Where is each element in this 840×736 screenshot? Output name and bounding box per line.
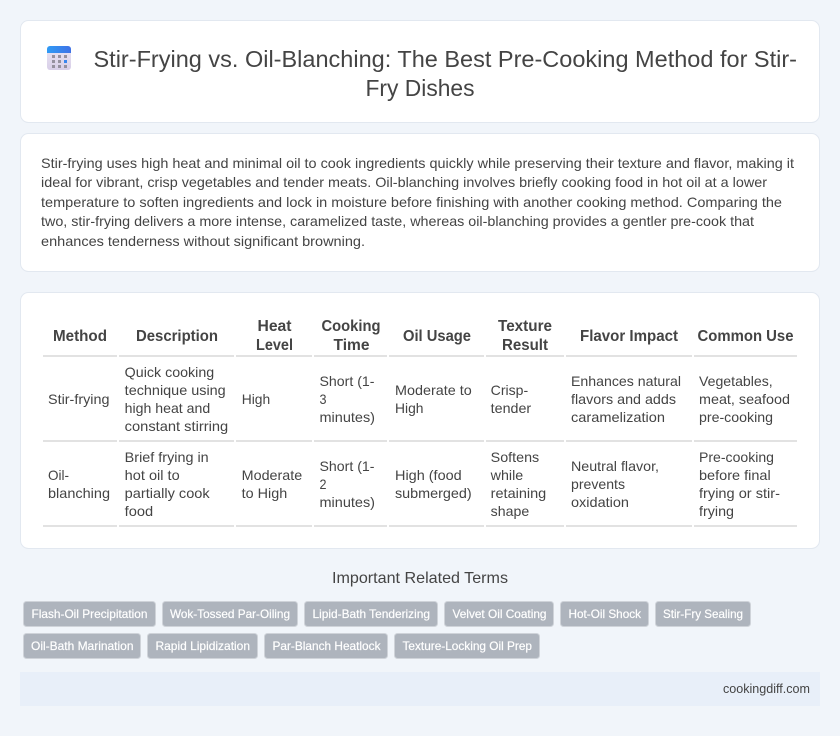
table row: stir-frying: tender — [491, 400, 532, 416]
text block: summary paragraph — [41, 155, 794, 249]
related term tags: Texture-Locking Oil Prep — [402, 639, 532, 653]
table row: oil-blanching: prevents — [571, 476, 625, 492]
icon: calendar — [47, 46, 71, 70]
related term tags: Stir-Fry Sealing — [663, 607, 743, 621]
table row: oil-blanching: Softens — [491, 449, 539, 465]
table row: oil-blanching: frying — [699, 503, 734, 519]
table row: oil-blanching: Oil- — [48, 467, 69, 483]
table header row: Oil Usage — [403, 328, 471, 345]
table row: oil-blanching: food — [125, 503, 153, 519]
table row: oil-blanching: hot oil to — [125, 467, 180, 483]
table row: oil-blanching: shape — [491, 503, 529, 519]
related term tags: Rapid Lipidization — [156, 639, 250, 653]
table row: stir-frying: high heat and — [125, 400, 210, 416]
table header row: Time — [334, 337, 370, 354]
table row: stir-frying: High — [395, 400, 424, 416]
table header row: Texture — [498, 318, 552, 335]
table row: stir-frying: Vegetables, — [699, 373, 773, 389]
table row: stir-frying: High — [242, 391, 270, 407]
related term tags: Velvet Oil Coating — [452, 607, 546, 621]
title: Stir-Frying vs. Oil-Blanching: The Best Pre-Cooking Method for Stir- — [94, 46, 797, 72]
table row: oil-blanching: Short (1- — [320, 458, 375, 474]
table header row: Common Use — [698, 328, 794, 345]
table row: stir-frying: constant stirring — [125, 418, 228, 434]
table header row: Flavor Impact — [580, 328, 678, 345]
table row: oil-blanching: to High — [242, 485, 287, 501]
text block: summary paragraph: enhances tenderness without significant browning. — [41, 233, 365, 249]
table header row: Method — [53, 328, 107, 345]
footer site name: cookingdiff.com — [723, 681, 810, 696]
table row: oil-blanching: minutes) — [320, 494, 375, 510]
related term tags: Wok-Tossed Par-Oiling — [170, 607, 290, 621]
table header row: Level — [256, 337, 293, 354]
table row: stir-frying: Quick cooking — [125, 364, 214, 380]
table row: stir-frying: Moderate to — [395, 382, 472, 398]
table row: stir-frying: pre-cooking — [699, 409, 773, 425]
table row: stir-frying: Short (1- — [320, 373, 375, 389]
table row: oil-blanching: retaining — [491, 485, 546, 501]
related term tags: Flash-Oil Precipitation — [32, 607, 148, 621]
related term tags: Par-Blanch Heatlock — [272, 639, 381, 653]
table header row — [53, 318, 794, 354]
table row: oil-blanching: while — [490, 467, 523, 483]
related term tags: Oil-Bath Marination — [31, 639, 134, 653]
table row: stir-frying: Enhances natural — [571, 373, 681, 389]
table header row: Description — [136, 328, 218, 345]
table header row: Heat — [258, 318, 292, 335]
table row: oil-blanching: blanching — [48, 485, 110, 501]
table row: stir-frying — [48, 364, 790, 434]
table row: oil-blanching: Moderate — [242, 467, 302, 483]
table row: oil-blanching: oxidation — [571, 494, 629, 510]
table row: stir-frying: minutes) — [320, 409, 375, 425]
heading: related terms: Important Related Terms — [332, 570, 508, 587]
table row: oil-blanching — [48, 449, 780, 519]
related term tags — [24, 602, 750, 658]
related term tags: Hot-Oil Shock — [568, 607, 642, 621]
table row: stir-frying: meat, seafood — [699, 391, 790, 407]
table row: stir-frying: 3 — [320, 391, 327, 407]
footer bar — [20, 672, 820, 706]
panel: summary text — [20, 134, 820, 272]
table row: stir-frying: flavors and adds — [571, 391, 676, 407]
title: Fry Dishes — [366, 75, 474, 101]
table row: stir-frying: Stir-frying — [48, 391, 110, 407]
table header row: Cooking — [322, 318, 380, 335]
text block: summary paragraph: ideal for vibrant, crisp vegetables and tender meats. Oil-blanching involves briefly cooking food in hot oil at a lower — [41, 174, 767, 190]
panel: comparison table — [20, 292, 820, 548]
table row: oil-blanching: frying or stir- — [699, 485, 780, 501]
table row: oil-blanching: submerged) — [395, 485, 472, 501]
table row: oil-blanching: Neutral flavor, — [571, 458, 659, 474]
panel: title card — [20, 20, 820, 122]
text block: summary paragraph: two, stir-frying delivers a more intense, caramelized taste, whereas oil-blanching provides a gentler pre-cook that — [41, 213, 754, 229]
table row: oil-blanching: Brief frying in — [125, 449, 209, 465]
table row: oil-blanching: 2 — [320, 476, 327, 492]
table row: stir-frying: Crisp- — [491, 382, 529, 398]
table row: oil-blanching: partially cook — [125, 485, 211, 501]
text block: summary paragraph: Stir-frying uses high heat and minimal oil to cook ingredients quickly while preserving their texture and flavor, making it — [41, 155, 794, 171]
table row: oil-blanching: Pre-cooking — [699, 449, 774, 465]
table row: oil-blanching: High (food — [395, 467, 462, 483]
related term tags: Lipid-Bath Tenderizing — [312, 607, 430, 621]
text block: summary paragraph: temperature to soften ingredients and lock in moisture before finishing with another cooking method. Comparing the — [41, 194, 782, 210]
table header row: Result — [502, 337, 548, 354]
table row: oil-blanching: before final — [699, 467, 771, 483]
table row: stir-frying: caramelization — [571, 409, 665, 425]
table row: stir-frying: technique using — [125, 382, 226, 398]
title — [94, 46, 797, 101]
